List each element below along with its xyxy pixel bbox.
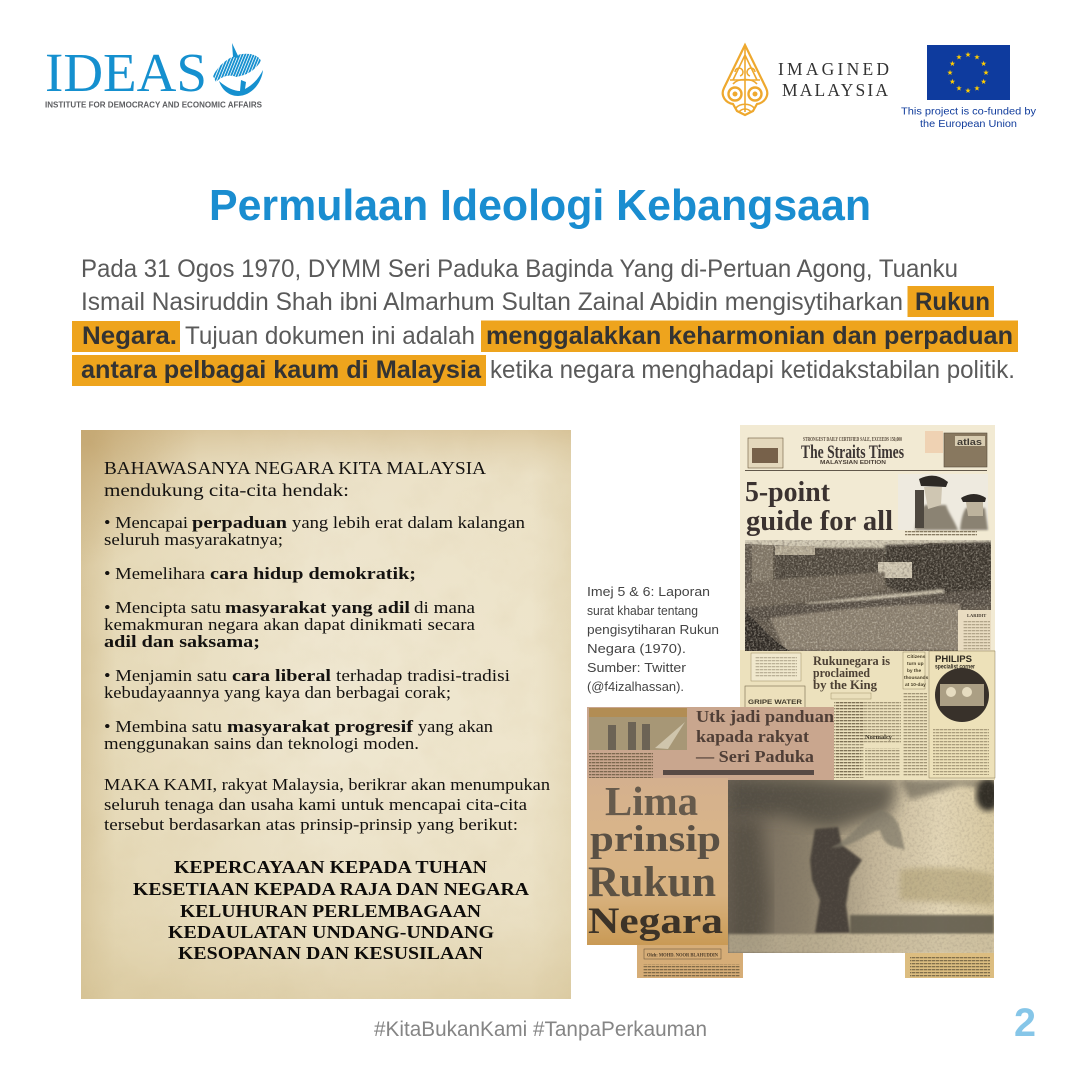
intro paragraph: menggalakkan keharmonian dan perpaduan [486, 322, 1013, 350]
article: Rukunegara is proclaimed: Normalcy [865, 735, 892, 741]
clipping headline: Lima [605, 778, 698, 824]
five principles: KEDAULATAN UNDANG-UNDANG [168, 922, 494, 942]
masthead: atlas [957, 437, 982, 447]
principles list: • Membina satu [104, 717, 223, 736]
intro paragraph: Pada 31 Ogos 1970, DYMM Seri Paduka Baginda Yang di-Pertuan Agong, Tuanku [81, 255, 958, 283]
pledge: MAKA KAMI, rakyat Malaysia, berikrar akan menumpukan [104, 775, 551, 794]
article: Rukunegara is proclaimed: GRIPE WATER [748, 699, 802, 706]
clipping byline and body [637, 945, 743, 978]
clipping photo [589, 708, 687, 750]
article: Rukunegara is proclaimed [745, 653, 901, 778]
article: Rukunegara is proclaimed: proclaimed [813, 666, 870, 680]
clipping sub-headline: Utk jadi panduan [696, 707, 835, 726]
hashtags: #KitaBukanKami #TanpaPerkauman [374, 1017, 707, 1041]
clipping headline [588, 778, 723, 942]
intro paragraph [72, 255, 1018, 386]
advert: Philips [929, 651, 995, 778]
five principles: KEPERCAYAAN KEPADA TUHAN [174, 857, 487, 877]
intro paragraph: Ismail Nasiruddin Shah ibni Almarhum Sultan Zainal Abidin mengisytiharkan [81, 288, 903, 316]
intro paragraph: ketika negara menghadapi ketidakstabilan politik. [490, 356, 1015, 384]
logo wordmark: IDEAS [45, 42, 207, 103]
principles list: terhadap tradisi-tradisi [336, 666, 510, 685]
headline: guide for all [746, 506, 893, 537]
logo: Imagined Malaysia [723, 45, 889, 115]
clipping headline: prinsip [590, 819, 721, 860]
logo tagline: INSTITUTE FOR DEMOCRACY AND ECONOMIC AFFAIRS [45, 100, 262, 110]
principles list: yang lebih erat dalam kalangan [292, 513, 526, 532]
image caption: pengisytiharan Rukun [587, 622, 719, 637]
principles list: adil dan saksama; [104, 632, 260, 651]
principles list: masyarakat progresif [227, 717, 413, 736]
pledge: tersebut berdasarkan atas prinsip-prinsip yang berikut: [104, 815, 518, 834]
intro paragraph: antara pelbagai kaum di Malaysia [81, 356, 482, 384]
photo: Merdeka Square crowd [745, 540, 994, 652]
wordmark line 2: MALAYSIA [782, 80, 888, 100]
image caption: Negara (1970). [587, 641, 686, 656]
principles list: di mana [414, 598, 475, 617]
clipping sub-headline [695, 707, 835, 766]
five principles: KESOPANAN DAN KESUSILAAN [178, 943, 483, 963]
principles list: yang akan [418, 717, 494, 736]
clipping headline: Negara [588, 901, 723, 942]
preamble: mendukung cita-cita hendak: [104, 480, 349, 500]
sidebar column: thousands [904, 675, 929, 681]
image caption: surat khabar tentang [587, 603, 698, 618]
sidebar column: Citizens [907, 654, 926, 660]
principles list: cara liberal [232, 666, 331, 685]
newspaper: The Straits Times [740, 425, 995, 780]
advert: Philips: specialist corner [935, 664, 976, 670]
intro paragraph: Tujuan dokumen ini adalah [185, 322, 475, 350]
clipping photo caption [905, 953, 994, 978]
sidebar column: by the [907, 668, 921, 674]
clipping sub-headline: — Seri Paduka [695, 747, 815, 766]
principles list: kemakmuran negara akan dapat dinikmati secara [104, 615, 475, 634]
intro paragraph: Rukun [915, 288, 990, 316]
principles list: • Memelihara [104, 564, 205, 583]
principles list: masyarakat yang adil [225, 598, 410, 617]
logo: IDEAS [45, 42, 263, 110]
sidebar column: turn up [907, 661, 924, 667]
principles list: • Mencapai [104, 513, 188, 532]
headline: 5-point [745, 477, 831, 508]
principles list: menggunakan sains dan teknologi moden. [104, 734, 419, 753]
article: Rukunegara is proclaimed: Rukunegara is [813, 654, 890, 668]
clipping photo: royal salute [728, 779, 1000, 953]
photo: officers [898, 474, 988, 536]
article: Rukunegara is proclaimed: by the King [813, 678, 878, 692]
principles list: kebudayaannya yang kaya dan berbagai corak; [104, 683, 451, 702]
logo: EU flag and funding note [901, 45, 1037, 130]
icon: wayang puppet [723, 45, 767, 115]
wordmark line 1: IMAGINED [778, 59, 889, 79]
image caption: Imej 5 & 6: Laporan [587, 584, 710, 599]
clipping sub-headline: kapada rakyat [696, 727, 809, 746]
sidebar column: at 10-day [905, 682, 926, 688]
pledge [104, 775, 551, 834]
image caption: Sumber: Twitter [587, 660, 687, 675]
highlight bars [72, 286, 1018, 386]
image caption: (@f4izalhassan). [587, 679, 684, 694]
headline [745, 477, 893, 537]
five principles: KESETIAAN KEPADA RAJA DAN NEGARA [133, 879, 529, 899]
principles list: • Mencipta satu [104, 598, 222, 617]
advert: Philips: PHILIPS [935, 654, 972, 665]
principles list: perpaduan [192, 513, 288, 532]
five principles [133, 857, 529, 963]
pledge: seluruh tenaga dan usaha kami untuk mencapai cita-cita [104, 795, 527, 814]
funding note: the European Union [920, 118, 1017, 130]
page number: 2 [1014, 1001, 1036, 1045]
principles list [104, 513, 526, 753]
newspaper: Lima prinsip Rukun Negara [587, 707, 1000, 978]
intro paragraph: Negara. [82, 322, 177, 350]
principles list: • Menjamin satu [104, 666, 228, 685]
five principles: KELUHURAN PERLEMBAGAAN [180, 901, 481, 921]
funding note [901, 106, 1037, 130]
photo: Merdeka Square crowd: LARIDIT [967, 613, 986, 618]
principles list: seluruh masyarakatnya; [104, 530, 283, 549]
image caption [587, 584, 719, 694]
EU flag [927, 45, 1010, 100]
preamble [104, 458, 486, 500]
masthead: The Straits Times [801, 442, 904, 463]
panel: Rukun Negara parchment [81, 430, 571, 999]
funding note: This project is co-funded by [901, 106, 1037, 118]
clipping byline and body: Oleh: MOHD. NOOR BLAHUDDIN [647, 952, 718, 958]
icon: IDEAS dove [213, 43, 263, 96]
masthead: MALAYSIAN EDITION [820, 460, 886, 466]
sidebar column [903, 652, 929, 777]
clipping headline: Rukun [588, 859, 716, 906]
preamble: BAHAWASANYA NEGARA KITA MALAYSIA [104, 458, 486, 478]
clipping caption [589, 752, 653, 778]
principles list: cara hidup demokratik; [210, 564, 416, 583]
masthead [745, 431, 987, 471]
title: Permulaan Ideologi Kebangsaan [209, 181, 871, 230]
masthead: STRONGEST DAILY CERTIFIED SALE, EXCEEDS 150,000 [803, 437, 902, 443]
